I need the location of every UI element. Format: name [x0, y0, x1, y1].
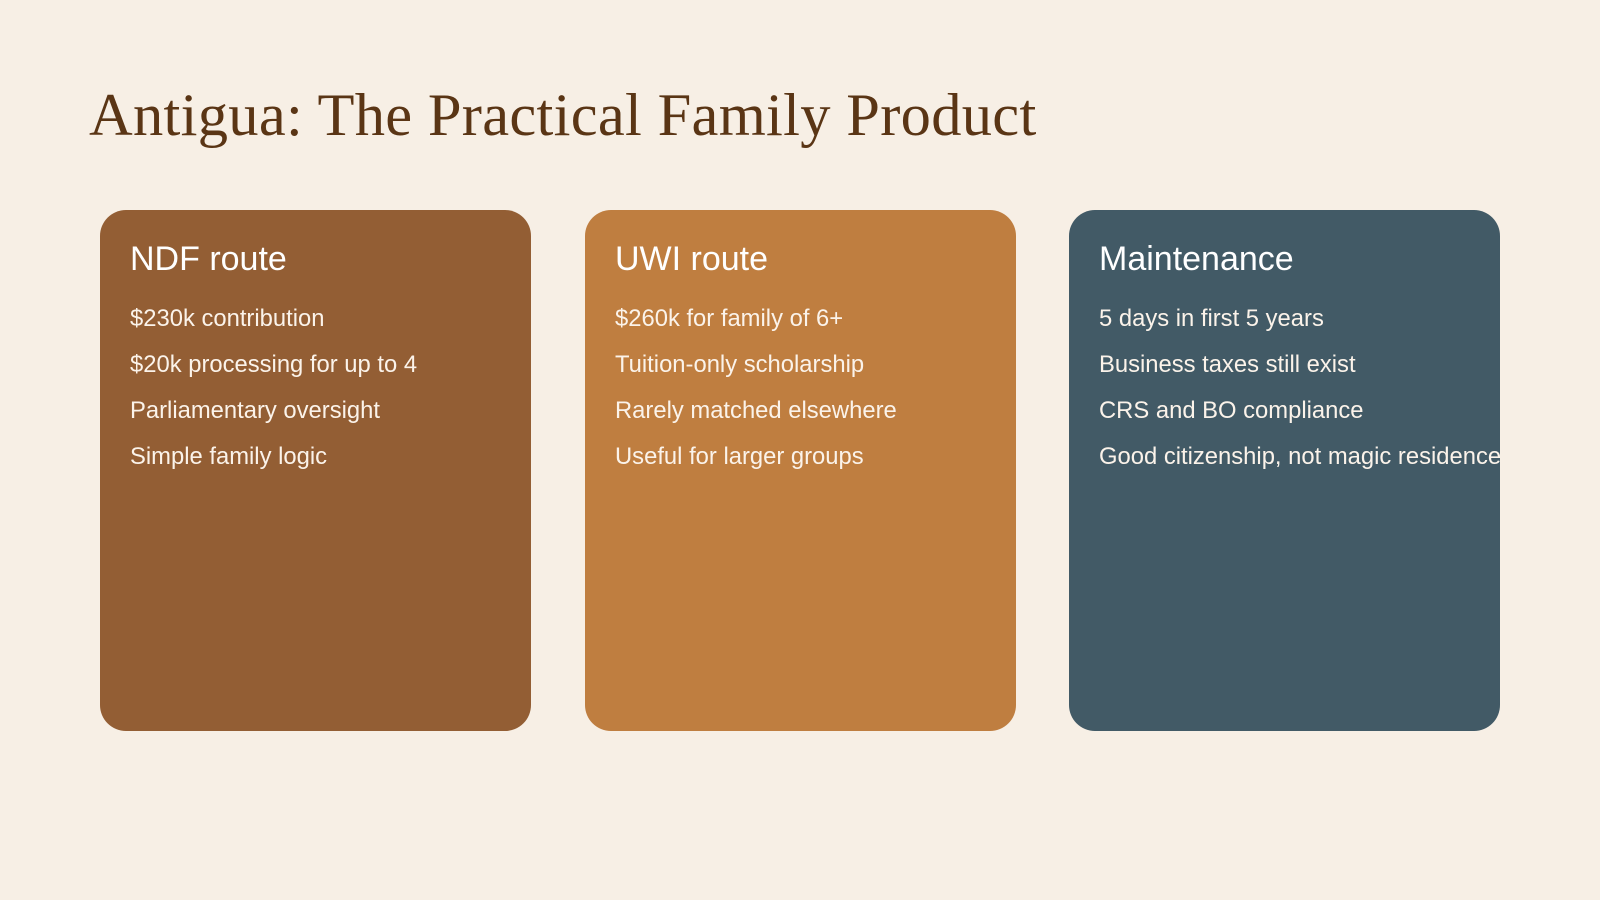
text block: UWI items: Useful for larger groups	[615, 443, 864, 470]
panel: Maintenance	[1069, 210, 1500, 731]
text block: UWI items	[615, 305, 897, 470]
text block: NDF items: Simple family logic	[130, 443, 327, 470]
text block: NDF items: Parliamentary oversight	[130, 397, 380, 424]
heading: UWI route: UWI route	[615, 240, 768, 278]
text block: UWI items: Tuition-only scholarship	[615, 351, 864, 378]
text block: Maintenance items: Business taxes still exist	[1099, 351, 1356, 378]
text block: Maintenance items: Good citizenship, not magic residence	[1099, 443, 1501, 470]
text block: UWI items: $260k for family of 6+	[615, 305, 843, 332]
text block: NDF items	[130, 305, 417, 470]
panel: UWI route	[585, 210, 1016, 731]
text block: NDF items: $230k contribution	[130, 305, 324, 332]
text block: NDF items: $20k processing for up to 4	[130, 351, 417, 378]
text block: Maintenance items: 5 days in first 5 years	[1099, 305, 1324, 332]
text block: Maintenance items	[1099, 305, 1501, 470]
panel: NDF route	[100, 210, 531, 731]
heading: NDF route: NDF route	[130, 240, 287, 278]
title: Antigua: The Practical Family Product	[89, 82, 1037, 149]
heading: Maintenance: Maintenance	[1099, 240, 1294, 278]
text block: Maintenance items: CRS and BO compliance	[1099, 397, 1364, 424]
text block: UWI items: Rarely matched elsewhere	[615, 397, 897, 424]
